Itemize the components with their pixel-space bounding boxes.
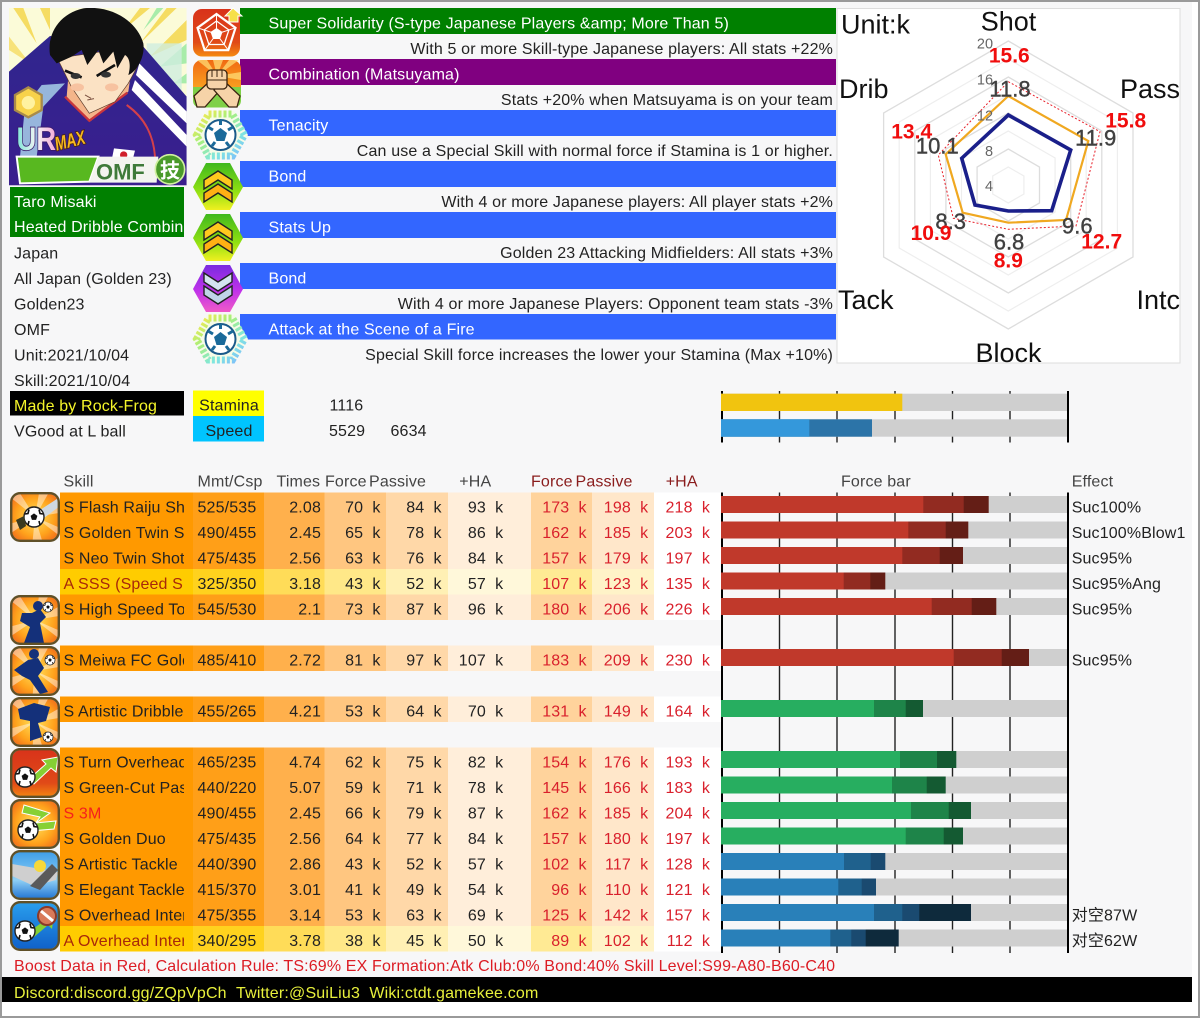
radar chart: 20 (977, 36, 993, 52)
skill row 4: 123 k (604, 576, 649, 593)
icon: purple chevrons (193, 265, 243, 312)
speed bar (721, 419, 1067, 437)
icon: pentagon web (193, 8, 242, 56)
boosted stats outline (938, 82, 1100, 229)
skill row 2: 65 k (345, 525, 381, 542)
skill icon: tackle (10, 850, 60, 900)
table header: Times (276, 474, 320, 491)
skill row 7: 131 k (542, 704, 588, 720)
skill row 8: 176 k (604, 754, 649, 772)
skill row 3 (60, 544, 1132, 569)
skill row 13: 49 k (406, 882, 443, 899)
radar chart: 4 (985, 179, 993, 195)
buff 3 (193, 110, 836, 160)
skill row 15: 102 k (604, 933, 649, 950)
skill row 11: 84 k (468, 831, 504, 848)
skill row 12: 43 k (345, 856, 381, 874)
table header: Force (325, 474, 367, 491)
skill row 11: 157 k (542, 831, 588, 848)
radar chart: 10.1 (916, 134, 959, 158)
player info list: OMF (14, 322, 50, 339)
credit label (10, 391, 184, 416)
skill row 1: 198 k (604, 500, 649, 516)
skill row 3: 475/435 (198, 550, 256, 568)
skill row 3: 179 k (604, 550, 649, 568)
radar chart: 12 (977, 108, 993, 124)
ball note: VGood at L ball (14, 424, 126, 440)
skill row 13: 110 k (605, 882, 649, 899)
skill row 15 (60, 926, 1138, 952)
radar chart: Unit:k (841, 10, 911, 40)
buff 7: Special Skill force increases the lower your Stamina (Max +10%) (365, 347, 833, 364)
skill row 5: 87 k (406, 602, 443, 618)
skill row 9: S Green-Cut Pass (64, 780, 196, 797)
skill row 13: 3.01 (289, 882, 321, 899)
icon: green chevrons (193, 163, 243, 210)
skill row 6: 107 k (459, 652, 504, 670)
skill row 4 (60, 569, 1161, 594)
stamina and speed values: 5529 (329, 423, 365, 440)
table header: Force (531, 474, 573, 491)
skill row 14: 53 k (345, 908, 381, 924)
radar chart: 16 (977, 72, 993, 88)
skill row 2: 490/455 (198, 525, 256, 542)
player info list: Unit:2021/10/04 (14, 348, 129, 364)
radar chart: 9.6 (1062, 214, 1093, 238)
radar chart: 12.7 (1081, 230, 1122, 254)
skill row 14: 125 k (542, 908, 588, 924)
radar chart: 8.9 (994, 250, 1023, 272)
skill row 6: 183 k (542, 652, 588, 670)
table header: +HA (459, 474, 491, 491)
buff 7: Attack at the Scene of a Fire (268, 322, 475, 338)
skill row 14: 63 k (406, 908, 443, 924)
skill row 1: 70 k (345, 500, 381, 516)
skill row 5: 206 k (604, 602, 649, 618)
radar chart (837, 6, 1180, 368)
skill row 7: 70 k (468, 704, 504, 720)
skill row 3: S Neo Twin Shot (64, 550, 185, 568)
skill row 7: 53 k (345, 704, 381, 720)
skill row 15: 89 k (551, 933, 588, 950)
table header: Force bar (841, 474, 911, 491)
skill row 6 (60, 646, 1132, 671)
skill row 14: 142 k (604, 908, 649, 924)
skill row 4: 43 k (345, 576, 381, 593)
skill row 4: 107 k (542, 576, 588, 593)
skill row 3: 2.56 (289, 550, 321, 568)
table header: Passive (369, 474, 426, 491)
footer links: Discord:discord.gg/ZQpVpCh Twitter:@SuiLiu3 Wiki:ctdt.gamekee.com (14, 985, 538, 1002)
buff 3: Tenacity (268, 118, 328, 134)
player info list (14, 246, 172, 390)
skill row 2: Suc100%Blow1 (1072, 525, 1186, 542)
skill row 13: 121 k (666, 882, 711, 899)
buff 1: With 5 or more Skill-type Japanese players: All stats +22% (410, 41, 833, 58)
table header: Passive (576, 474, 633, 491)
skill row 13: 41 k (345, 882, 381, 899)
skill row 12: 2.86 (289, 856, 321, 874)
skill row 8: 82 k (468, 754, 504, 772)
skill row 9: 5.07 (289, 780, 321, 797)
skill row 12: S Artistic Tackle (64, 856, 178, 874)
credit label: Made by Rock-Frog (14, 398, 157, 415)
table header: Effect (1072, 474, 1114, 491)
portrait: Taro Misaki card art: OMF (96, 159, 145, 184)
skill row 10: 79 k (406, 806, 443, 822)
skill row 1: S Flash Raiju Shot (64, 500, 199, 516)
skill row 7 (60, 696, 1067, 722)
skill row 9: 59 k (345, 780, 381, 797)
calculation note: Boost Data in Red, Calculation Rule: TS:69% EX Formation:Atk Club:0% Bond:40% Skill Level:S99-A80-B60-C40 (14, 958, 835, 975)
skill row 4: 52 k (406, 576, 443, 593)
icon: rainbow hex ball (193, 315, 248, 363)
skill row 13 (60, 875, 1067, 900)
skill row 2: 185 k (604, 525, 649, 542)
skill row 13: 415/370 (198, 882, 256, 899)
skill row 7: S Artistic Dribble (64, 704, 184, 720)
buff 2 (193, 59, 836, 109)
skill row 13: 54 k (468, 882, 504, 899)
skill row 15: 38 k (345, 933, 381, 950)
skill row 5: S High Speed Top (64, 602, 195, 618)
skill row 8: 154 k (542, 754, 588, 772)
skill row 7: 164 k (666, 704, 711, 720)
radar chart: Pass (1120, 74, 1180, 104)
skill row 1: 173 k (542, 500, 588, 516)
buff 6: Bond (268, 270, 306, 288)
skill row 6: 485/410 (198, 652, 256, 670)
skill row 4: 3.18 (289, 576, 321, 593)
player name panel (10, 187, 184, 237)
skill row 10 (60, 798, 1067, 824)
buff 4: With 4 or more Japanese players: All player stats +2% (441, 194, 833, 211)
skill row 15: 340/295 (198, 933, 256, 950)
skill row 11 (60, 824, 1067, 850)
skill row 3: 157 k (542, 550, 588, 568)
skill row 14: 475/355 (198, 908, 256, 924)
buff 2: Stats +20% when Matsuyama is on your team (501, 92, 833, 109)
skill row 6: 81 k (345, 652, 381, 670)
skill row 4: 325/350 (198, 576, 256, 593)
buff 5: Stats Up (268, 220, 331, 236)
buff 6 (193, 263, 836, 313)
player info list: All Japan (Golden 23) (14, 271, 172, 288)
skill row 12: 117 k (605, 856, 649, 874)
skill row 12 (60, 850, 1067, 875)
skill icon: artistic dribble (10, 697, 60, 747)
buff 7 (193, 314, 836, 364)
skill row 12: 102 k (542, 856, 588, 874)
skill row 9: 440/220 (198, 780, 256, 797)
skill row 4: 57 k (468, 576, 504, 593)
skill row 2: 78 k (406, 525, 443, 542)
stamina and speed values (329, 398, 427, 440)
skill row 12: 440/390 (198, 856, 256, 874)
player name panel: Taro Misaki (14, 194, 97, 211)
radar chart: Tack (838, 285, 894, 315)
skill row 8: 62 k (345, 754, 381, 772)
skill row 12: 57 k (468, 856, 504, 874)
radar chart: 13.4 (891, 120, 932, 144)
radar chart: Drib (839, 74, 889, 104)
skill row 10: 2.45 (289, 806, 321, 822)
radar chart: Intc (1136, 285, 1180, 315)
skill row 14 (60, 900, 1138, 926)
skill row 9 (60, 773, 1067, 798)
skill row 7: 455/265 (198, 704, 256, 720)
skill row 3: 84 k (468, 550, 504, 568)
skill row 11: S Golden Duo (64, 831, 166, 848)
skill row 7: 64 k (406, 704, 443, 720)
skill icon: interception (10, 901, 60, 951)
skill row 8: 75 k (406, 754, 443, 772)
skill row 6: 230 k (666, 652, 711, 670)
buff 1 (193, 8, 836, 58)
radar chart: 11.9 (1075, 126, 1116, 150)
skill row 6: 2.72 (289, 652, 321, 670)
skill row 3: 63 k (345, 550, 381, 568)
orange stats outline (946, 96, 1088, 223)
skill row 11: 2.56 (289, 831, 321, 848)
skill row 10: S 3M (64, 806, 101, 822)
skill row 9: 71 k (406, 780, 443, 797)
buff 2: Combination (Matsuyama) (268, 66, 460, 84)
table header: Skill (64, 474, 94, 491)
skill row 5 (60, 594, 1132, 620)
radar chart: Shot (981, 6, 1037, 36)
skill row 13: 96 k (551, 882, 588, 899)
skill row 3: Suc95% (1072, 550, 1132, 568)
skill row 5: 73 k (345, 602, 381, 618)
skill icon: zigzag pass (10, 799, 60, 849)
skill row 10: 87 k (468, 806, 504, 822)
table header (64, 474, 1114, 491)
skill row 14: S Overhead Inter (64, 908, 188, 924)
base stats outline (962, 115, 1071, 211)
skill row 9: 183 k (666, 780, 711, 797)
radar chart: 8 (985, 144, 993, 160)
top grid (722, 391, 1068, 442)
skill row 11: 77 k (406, 831, 443, 848)
player info list: Japan (14, 246, 58, 262)
buff 3: Can use a Special Skill with normal force if Stamina is 1 or higher. (357, 143, 833, 160)
skill row 5: 2.1 (298, 602, 321, 618)
skill row 10: 204 k (666, 806, 711, 822)
skill row 14: 对空87W (1072, 906, 1138, 924)
skill row 7: 4.21 (289, 704, 321, 720)
skill row 8 (60, 748, 1067, 773)
skill row 1: 93 k (468, 500, 504, 516)
skill row 14: 69 k (468, 908, 504, 924)
skill row 15: A Overhead Inter (64, 933, 187, 950)
buff 4 (193, 161, 836, 211)
stamina bar (721, 394, 1067, 411)
skill row 15: 对空62W (1072, 932, 1138, 950)
skill row 3: 197 k (666, 550, 711, 568)
skill row 10: 162 k (542, 806, 588, 822)
skill row 6: Suc95% (1072, 652, 1132, 670)
skill row 2: 86 k (468, 525, 504, 542)
skill row 6: 209 k (604, 652, 649, 670)
skill row 11: 64 k (345, 831, 381, 848)
portrait: Taro Misaki card art (9, 8, 187, 185)
skill icon: pass arrow (10, 748, 60, 798)
buff 5 (193, 212, 836, 262)
skill row 2: 162 k (542, 525, 588, 542)
skill icon: dribble silhouette (10, 595, 60, 645)
skill row 5: 96 k (468, 602, 504, 618)
skill row 7: 149 k (604, 704, 649, 720)
radar chart: 10.9 (911, 222, 951, 245)
skill row 4: 135 k (666, 576, 711, 593)
stamina and speed labels (193, 390, 264, 442)
radar chart: 11.8 (989, 76, 1031, 102)
player info list: Skill:2021/10/04 (14, 373, 130, 390)
icon: rainbow hex ball (193, 111, 248, 159)
skill row 3: 76 k (406, 550, 443, 568)
stamina and speed values: 6634 (390, 423, 427, 440)
portrait: Taro Misaki card art: MAX (53, 128, 88, 156)
skill row 10: 66 k (345, 806, 381, 822)
buff 6: With 4 or more Japanese Players: Opponent team stats -3% (398, 296, 833, 313)
skill row 9: 166 k (604, 780, 649, 797)
radar chart: 15.8 (1105, 110, 1146, 132)
skill row 8: 4.74 (289, 754, 321, 772)
radar chart: 6.8 (994, 230, 1024, 254)
buff 5: Golden 23 Attacking Midfielders: All stats +3% (500, 245, 833, 262)
player info list: Golden23 (14, 296, 85, 314)
skill row 1: Suc100% (1072, 500, 1141, 516)
portrait: Taro Misaki card art: 技 (160, 159, 180, 182)
skill row 14: 3.14 (289, 908, 321, 924)
skill row 5: 226 k (666, 602, 711, 618)
skill row 15: 45 k (406, 933, 443, 950)
skill icon: shot (10, 492, 60, 542)
skill row 2: 203 k (666, 525, 711, 542)
force bar grid (722, 492, 1068, 953)
skill row 5: 545/530 (198, 602, 256, 618)
skill row 1: 218 k (666, 500, 711, 516)
skill row 4: Suc95%Ang (1072, 576, 1161, 593)
skill row 5: 180 k (542, 602, 588, 618)
skill row 2: S Golden Twin Shot (64, 525, 208, 542)
skill row 6: 97 k (406, 652, 443, 670)
skill row 6: S Meiwa FC Gold (64, 652, 191, 670)
skill row 12: 128 k (666, 856, 711, 874)
buff 1: Super Solidarity (S-type Japanese Players &amp; More Than 5) (268, 16, 729, 32)
skill row 11: 197 k (666, 831, 711, 848)
skill row 15: 3.78 (289, 933, 321, 950)
skill icon: kick silhouette (10, 646, 60, 696)
radar chart: Block (975, 338, 1042, 368)
skill row 13: S Elegant Tackle (64, 882, 185, 899)
icon: green chevrons (193, 214, 243, 261)
skill row 5: Suc95% (1072, 602, 1132, 618)
stamina and speed values: 1116 (330, 398, 363, 415)
stamina and speed labels: Speed (205, 423, 253, 440)
skill row 12: 52 k (406, 856, 443, 874)
player name panel: Heated Dribble Combination (14, 219, 219, 236)
skill row 2 (60, 518, 1186, 544)
skill row 2: 2.45 (289, 525, 321, 542)
radar chart: 8.3 (935, 209, 966, 234)
skill row 15: 112 k (667, 933, 711, 950)
radar chart: 15.6 (989, 44, 1030, 68)
portrait: Taro Misaki card art: UR (17, 121, 56, 157)
skill row 10: 185 k (604, 806, 649, 822)
skill row 1 (60, 492, 1141, 518)
buff 4: Bond (268, 168, 306, 186)
skill row 9: 145 k (542, 780, 588, 797)
skill row 1: 2.08 (289, 500, 321, 516)
skill row 1: 84 k (406, 500, 443, 516)
footer links (2, 977, 1192, 1002)
skill row 11: 180 k (604, 831, 649, 848)
skill row 11: 475/435 (198, 831, 256, 848)
skill row 9: 78 k (468, 780, 504, 797)
skill row 8: S Turn Overhead (64, 754, 188, 772)
skill row 4: A SSS (Speed Shot) (64, 576, 211, 593)
skill row 14: 157 k (666, 908, 711, 924)
skill row 1: 525/535 (198, 500, 256, 516)
table header: +HA (666, 474, 698, 491)
table header: Mmt/Csp (198, 474, 263, 491)
skill row 10: 490/455 (198, 806, 256, 822)
skill row 8: 465/235 (198, 754, 256, 772)
skill row 15: 50 k (468, 933, 504, 950)
stamina and speed labels: Stamina (199, 398, 259, 415)
icon: arm clasp (193, 60, 241, 108)
skill row 8: 193 k (666, 754, 711, 772)
